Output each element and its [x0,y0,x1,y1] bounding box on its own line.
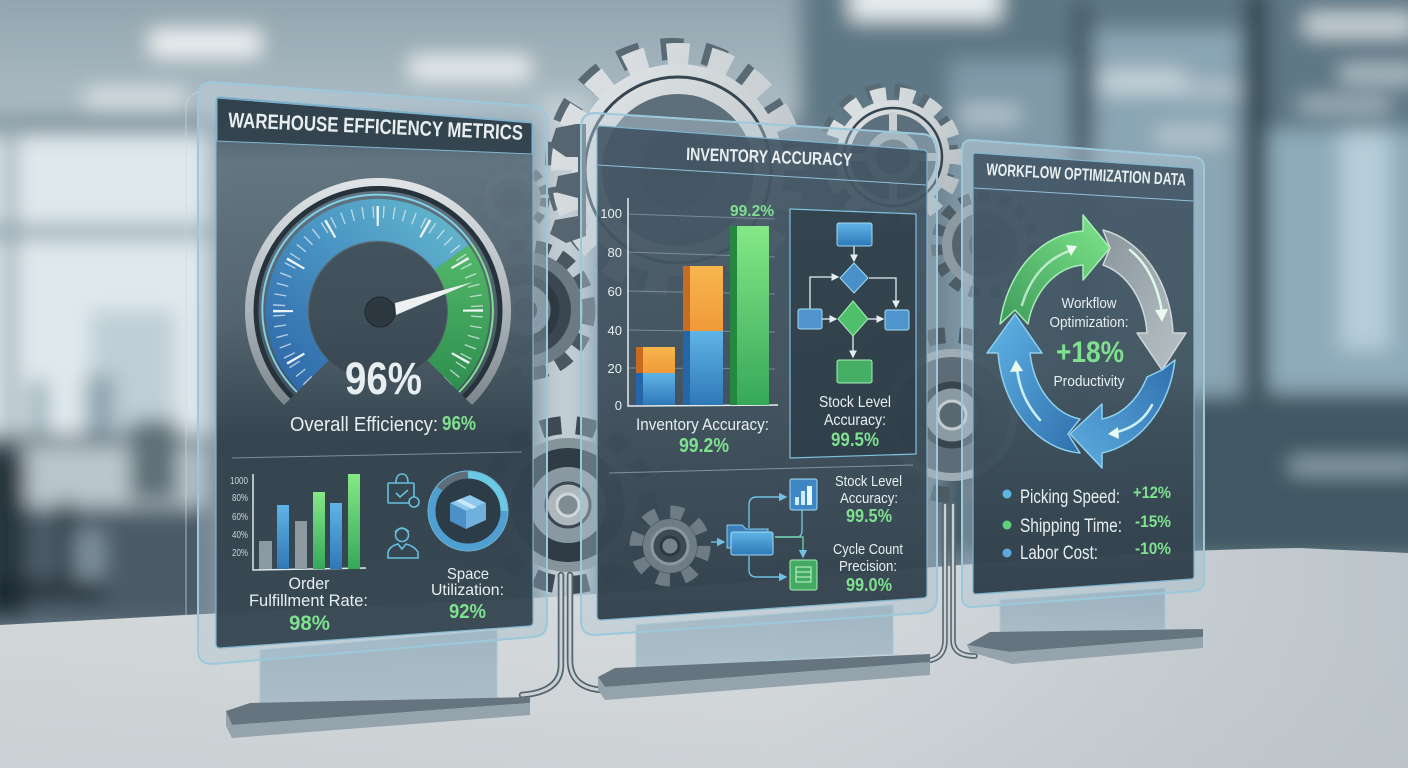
arrow: blue left [987,314,1080,453]
chart: space utilization ring [428,471,508,551]
bar chart: order fulfillment: 20% [232,548,248,559]
label: cycle count precision: Precision: [839,558,897,575]
title: workflow optimization data: WORKFLOW OPTIMIZATION DATA [986,160,1187,189]
bar chart: order fulfillment: 40% [232,530,248,541]
gear: left teeth side faces [550,124,586,243]
callout: workflow optimization +18%: Optimization: [1050,314,1128,331]
label: stock level accuracy: Accuracy: [840,490,898,507]
panel: warehouse efficiency metrics [186,82,547,738]
list: workflow metrics: Shipping Time: [1020,516,1122,537]
title: warehouse efficiency metrics: WAREHOUSE EFFICIENCY METRICS [228,109,524,145]
arrow: blue lower [1070,360,1175,468]
icon: process gear [636,512,704,580]
bar chart: inventory accuracy: 0 [615,398,622,413]
label: space utilization [431,566,504,623]
bar chart: order fulfillment [230,474,366,570]
callout: workflow optimization +18%: +18% [1056,336,1124,369]
label: inventory accuracy [636,415,769,457]
flowchart: stock level [790,209,916,458]
label: stock level accuracy: Stock Level [835,473,902,490]
title: inventory accuracy: INVENTORY ACCURACY [686,144,852,170]
bar chart: inventory accuracy: 80 [608,245,622,260]
flowchart: stock level: Stock Level [819,394,891,411]
bar chart: inventory accuracy: 40 [608,323,622,338]
icon: clipboard check [388,474,419,507]
label: space utilization: 92% [449,601,486,623]
gear: behind second and third panel lower [872,335,1032,495]
callout: workflow optimization +18%: Workflow [1062,295,1117,312]
panel: inventory accuracy [581,113,937,700]
flowchart: stock level: Accuracy: [824,412,886,429]
list: workflow metrics: -10% [1135,539,1171,558]
bar chart: order fulfillment: 60% [232,512,248,523]
flow diagram: folder to outputs [711,479,817,590]
header band: panel 1 [217,98,532,154]
bar chart: inventory accuracy: 60 [608,284,622,299]
label: space utilization: Space [447,566,489,583]
gear: behind first panel lower [488,425,648,585]
flowchart: stock level: 99.5% [831,430,879,451]
label: order fulfillment rate: Order [288,574,330,593]
icon: document tile [790,560,817,590]
screen: panel 3 [973,153,1194,594]
bar chart: inventory accuracy: 20 [608,361,622,376]
screen: panel 2 [597,126,927,620]
screen: panel 1 [216,97,533,648]
arrow: grey [1103,230,1186,370]
callout: workflow optimization +18% [1050,295,1128,390]
bar chart: inventory accuracy: 100 [600,206,622,221]
label: stock level accuracy: 99.5% [846,506,892,526]
list: workflow metrics [1002,483,1171,564]
icon: analytics tile [790,479,817,510]
bar chart: order fulfillment: 80% [232,493,248,504]
gear: behind third panel upper [937,197,1033,293]
gauge: overall efficiency: 96% [345,353,422,404]
label: stock level accuracy [835,473,902,526]
table surface [0,548,1408,768]
arrow: green [1000,215,1110,324]
gear: behind first panel upper [479,165,545,231]
callout: workflow optimization +18%: Productivity [1054,373,1125,390]
label: order fulfillment rate: Fulfillment Rate: [249,591,368,610]
bar chart: inventory accuracy [600,198,778,413]
label: cycle count precision [833,541,904,595]
stand: panel 1 [226,630,530,738]
bar chart: inventory accuracy: 99.2% [730,203,774,220]
label: order fulfillment rate: 98% [289,612,330,635]
label: inventory accuracy: 99.2% [679,435,729,457]
gear: behind first panel middle [461,246,589,374]
gear: large top [536,29,814,306]
label: space utilization: Utilization: [431,582,504,599]
label: order fulfillment rate [249,574,368,635]
icon: worker [388,528,418,558]
gauge: overall efficiency [250,183,506,404]
list: workflow metrics: Picking Speed: [1020,487,1120,508]
cycle diagram: four arrows [987,215,1186,468]
background gears [461,29,1033,585]
label: cycle count precision: 99.0% [846,575,892,595]
label: overall efficiency: 96% [442,413,476,435]
stand: panel 3 [967,588,1203,664]
gear: top right [818,83,963,227]
stand: panel 2 [598,605,930,700]
label: cycle count precision: Cycle Count [833,541,904,558]
icon: box [450,495,486,529]
glass frame: panel 1 [198,82,547,664]
list: workflow metrics: +12% [1133,483,1171,502]
label: overall efficiency: Overall Efficiency: [290,414,438,436]
glass frame: panel 2 [581,113,937,635]
list: workflow metrics: Labor Cost: [1020,543,1098,564]
glass frame: panel 3 [962,140,1204,607]
label: inventory accuracy: Inventory Accuracy: [636,415,769,434]
list: workflow metrics: -15% [1135,512,1171,531]
inner highlight arrows [1017,250,1162,433]
panel: workflow optimization data [962,140,1204,664]
bar chart: order fulfillment: 1000 [230,476,248,487]
connecting tubes [522,505,975,695]
